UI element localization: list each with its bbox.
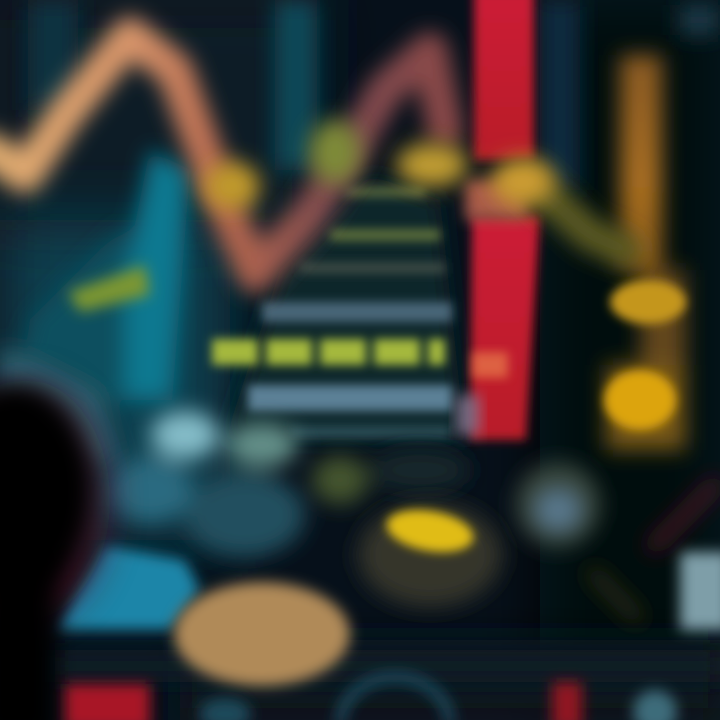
yellow highlights along the line <box>204 120 554 210</box>
central tower chart <box>212 175 465 440</box>
orange vertical bar <box>606 55 686 450</box>
yellow oval coin <box>358 503 502 607</box>
right yellow coins <box>604 280 686 430</box>
light coin cluster at lower centre <box>108 411 470 557</box>
small olive label on teal bar <box>68 265 150 312</box>
red vertical bar <box>456 0 540 440</box>
blue wedge at bottom left <box>55 545 200 630</box>
background vertical teal columns <box>28 0 718 190</box>
bottom dark band <box>55 650 720 682</box>
teal rising bar on left <box>0 150 190 470</box>
dark silhouette on left <box>0 380 110 720</box>
tower body <box>225 175 465 440</box>
zigzag price line <box>0 35 625 275</box>
right red diagonal accent <box>590 480 720 620</box>
bottom row items <box>65 677 677 720</box>
tan oval coin <box>174 582 350 686</box>
right side pale block <box>680 552 720 630</box>
grey round coin right <box>516 463 600 547</box>
tower stripes <box>212 192 452 432</box>
